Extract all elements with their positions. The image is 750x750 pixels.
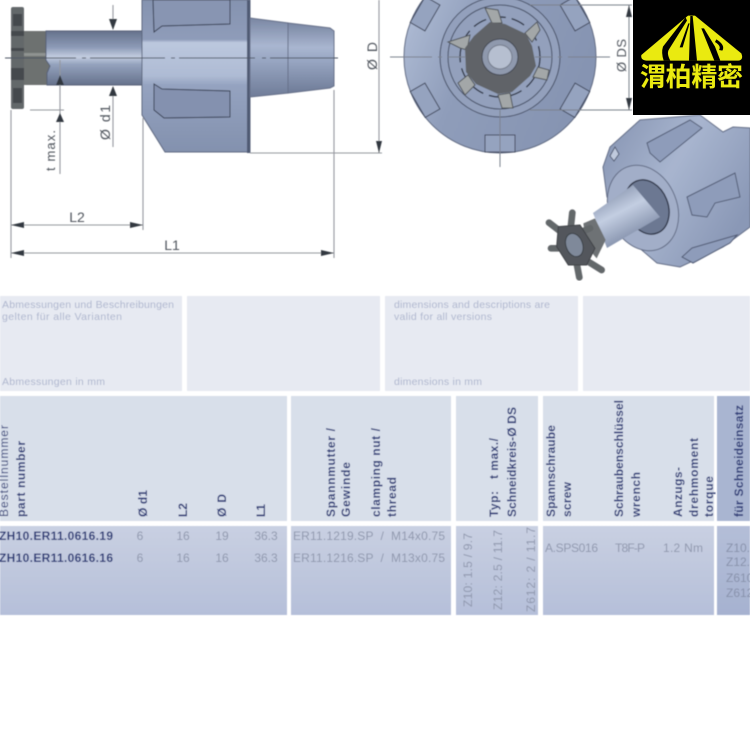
label: D: Ø D (364, 42, 380, 70)
label: d1: Ø d1 (97, 105, 113, 140)
row values: ER11.1216.SP / M13x0.75 (293, 551, 445, 565)
label: t max: t max. (43, 130, 58, 171)
nut notches (410, 0, 590, 152)
column headings: wrench (629, 472, 643, 518)
panel: German notes (0, 296, 182, 391)
row values: T8F-P (615, 541, 645, 555)
row values: 6 (137, 551, 144, 565)
rotated type values (461, 527, 538, 612)
column headings: thread (385, 477, 399, 517)
logo text: 渭柏精密 (640, 57, 743, 94)
column headings: für Schneideinsatz (732, 405, 746, 517)
nut bore (617, 173, 677, 241)
collet cone (250, 18, 334, 97)
cutter with six teeth (448, 8, 549, 108)
shank (46, 31, 143, 85)
row values: 6 (137, 529, 144, 543)
panel: German notes: Abmessungen und Beschreibungen (2, 299, 174, 311)
nut body (603, 115, 750, 267)
column headings: L2 (176, 503, 190, 517)
row values: Z10. (726, 541, 750, 555)
panel: English notes (385, 296, 578, 391)
specification table (0, 396, 750, 615)
clamping nut (142, 0, 250, 153)
column headings: clamping nut / (369, 427, 383, 517)
logo badge (633, 0, 750, 115)
column headings: Spannmutter / (324, 427, 338, 517)
panel: English notes: dimensions and descriptions are (394, 299, 550, 311)
label: L2: L2 (69, 209, 85, 225)
column headings: torque (702, 476, 716, 517)
logo fan mark (641, 16, 742, 61)
row values: 16 (176, 551, 190, 565)
panel: German notes: gelten für alle Varianten (2, 311, 122, 323)
label: DS: Ø DS (614, 39, 629, 72)
column headings: Ø D (215, 494, 229, 517)
row values: 1.2 Nm (663, 541, 703, 555)
panel: English notes: dimensions in mm (394, 376, 482, 388)
panel: blank note right (583, 296, 750, 391)
rotated type values: Z612: 2 / 11.7 (524, 527, 538, 612)
part numbers (0, 529, 113, 565)
inner rings (440, 0, 560, 117)
side view technical drawing (5, 0, 382, 258)
table data backgrounds (0, 526, 750, 615)
dimension lines (11, 0, 382, 258)
column headings: Typ: t max./ (487, 437, 501, 517)
column headings: L1 (254, 504, 268, 517)
nut recesses (610, 120, 740, 263)
row values: 16 (215, 551, 229, 565)
nut front ring (595, 154, 691, 262)
row values: A.SPS016 (545, 541, 598, 555)
panel: blank note (187, 296, 380, 391)
row values (137, 529, 750, 600)
row values: 36.3 (254, 551, 278, 565)
column headings: Anzugs- (671, 467, 685, 517)
centre line (5, 57, 338, 59)
nut face (404, 0, 596, 153)
isometric view of tool (549, 115, 750, 277)
row values: ER11.1219.SP / M14x0.75 (293, 529, 445, 543)
row values: 16 (176, 529, 190, 543)
column headings: Spannschraube (544, 425, 558, 517)
column headings: Schneidkreis-Ø DS (505, 407, 519, 517)
part numbers: ZH10.ER11.0616.16 (0, 551, 113, 565)
centre lines (390, 57, 610, 167)
DS dimension (530, 5, 632, 110)
cutter (549, 213, 606, 277)
front view technical drawing (390, 0, 632, 167)
panel: German notes: Abmessungen in mm (2, 376, 105, 388)
rotated type values: Z10: 1.5 / 9.7 (461, 533, 475, 607)
shank (593, 185, 660, 248)
panel: English notes: valid for all versions (394, 311, 492, 323)
row values: 19 (215, 529, 229, 543)
logo background (633, 0, 750, 115)
row values: 36.3 (254, 529, 278, 543)
notes panels (0, 296, 750, 391)
dimension arrows (11, 19, 382, 256)
column headings: Gewinde (339, 462, 353, 517)
label: L1: L1 (164, 237, 180, 253)
table header backgrounds (0, 396, 750, 521)
column headings: drehmoment (687, 438, 701, 517)
column headings: Schraubenschlüssel (612, 400, 626, 517)
column headings: Ø d1 (136, 490, 150, 517)
cutter head (11, 7, 50, 109)
rotated type values: Z12: 2.5 / 11.7 (491, 530, 505, 610)
column headings: part number (14, 441, 28, 517)
part numbers: ZH10.ER11.0616.19 (0, 529, 113, 543)
column headings: screw (560, 481, 574, 517)
row values: Z12. (726, 555, 750, 569)
column headings (0, 400, 746, 518)
